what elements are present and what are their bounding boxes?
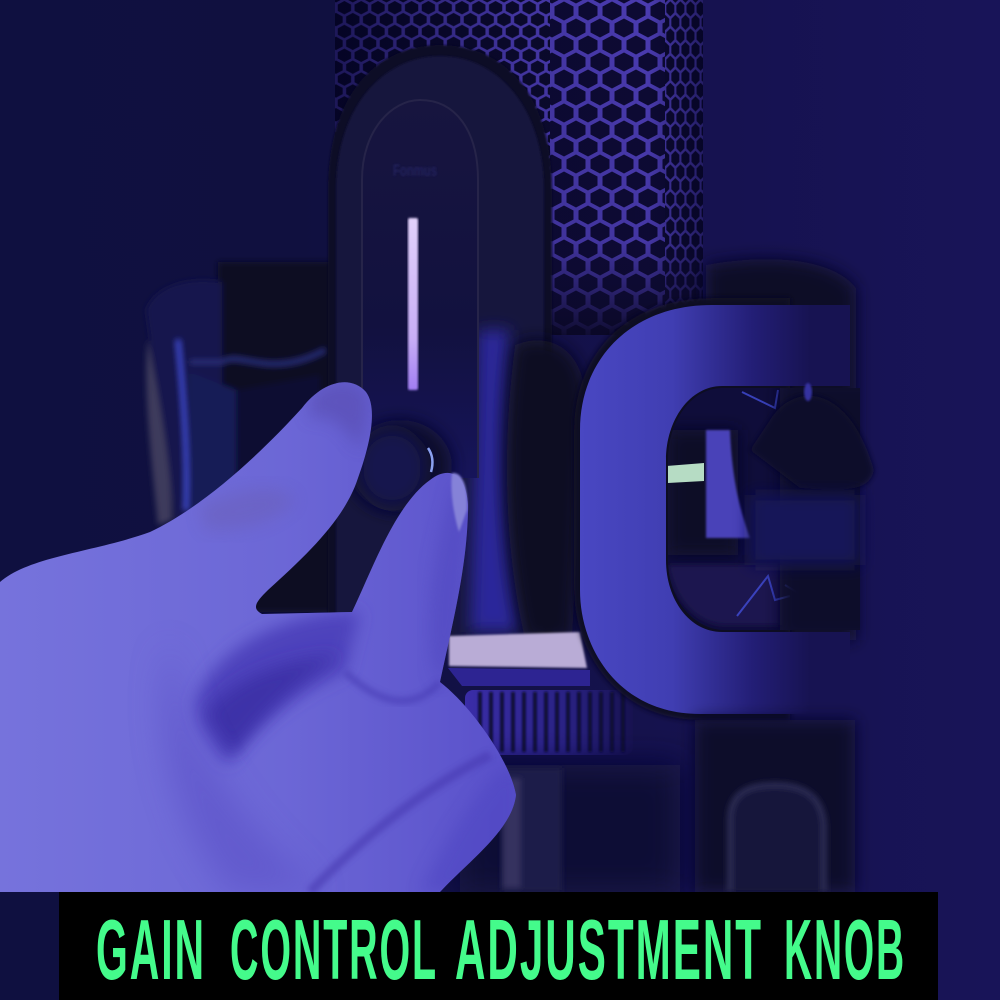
middle finger shaded area: [195, 612, 360, 765]
dark shadow behind hand: [240, 440, 470, 612]
logo on body: Fonmus: [393, 161, 437, 180]
dark shadow on body right: [507, 340, 585, 640]
C-shaped shock mount clip: [574, 259, 880, 720]
gain knob: [348, 420, 452, 512]
lit lower right body band: [470, 330, 520, 632]
caption bar: [59, 892, 938, 1000]
clip dark outline: [574, 298, 790, 720]
level indicator light: [408, 218, 418, 390]
base light ring and knurled ring: [448, 632, 680, 892]
hand: [0, 381, 520, 892]
clip face: [580, 305, 850, 714]
fingernail: [451, 473, 467, 532]
caption text: GAIN: [96, 903, 206, 998]
lower stand arm: [695, 720, 855, 892]
shading on thumb tip: [310, 381, 368, 450]
caption text: [96, 903, 906, 998]
microphone grille: [335, 0, 703, 335]
dark bump on right: [750, 396, 874, 490]
knuckle texture: [200, 489, 295, 530]
palm shading: [164, 695, 286, 890]
front panel: [362, 100, 478, 478]
caption text: CONTROL: [230, 903, 438, 998]
left shock mount arm: [146, 262, 338, 525]
index finger shading: [436, 521, 463, 667]
microphone body: [328, 45, 585, 640]
inner window of clip: [668, 388, 860, 630]
